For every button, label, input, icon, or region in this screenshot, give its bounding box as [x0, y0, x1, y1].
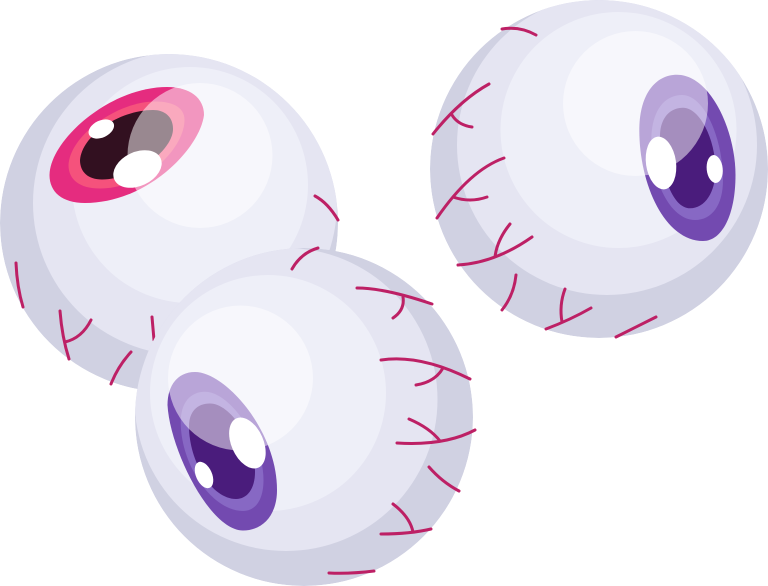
- eye glints: [85, 116, 168, 195]
- eye glints: [642, 135, 724, 191]
- purple iris: [639, 75, 736, 241]
- pink iris: [50, 87, 204, 203]
- glossy highlight: [128, 83, 272, 228]
- eye glints: [191, 412, 273, 491]
- purple iris: [168, 372, 277, 530]
- blood veins: [433, 28, 656, 337]
- sclera shading: [430, 0, 768, 338]
- blood veins: [16, 196, 338, 384]
- glossy highlight: [168, 306, 313, 450]
- eyeball: purple iris, upper right: [430, 0, 768, 338]
- sclera shading: [0, 51, 338, 392]
- eyeball: purple iris, lower centre: [134, 248, 475, 586]
- eyeball: pink iris, upper left: [0, 51, 338, 392]
- blood veins: [292, 248, 475, 573]
- glossy highlight: [563, 31, 708, 176]
- sclera shading: [134, 248, 473, 586]
